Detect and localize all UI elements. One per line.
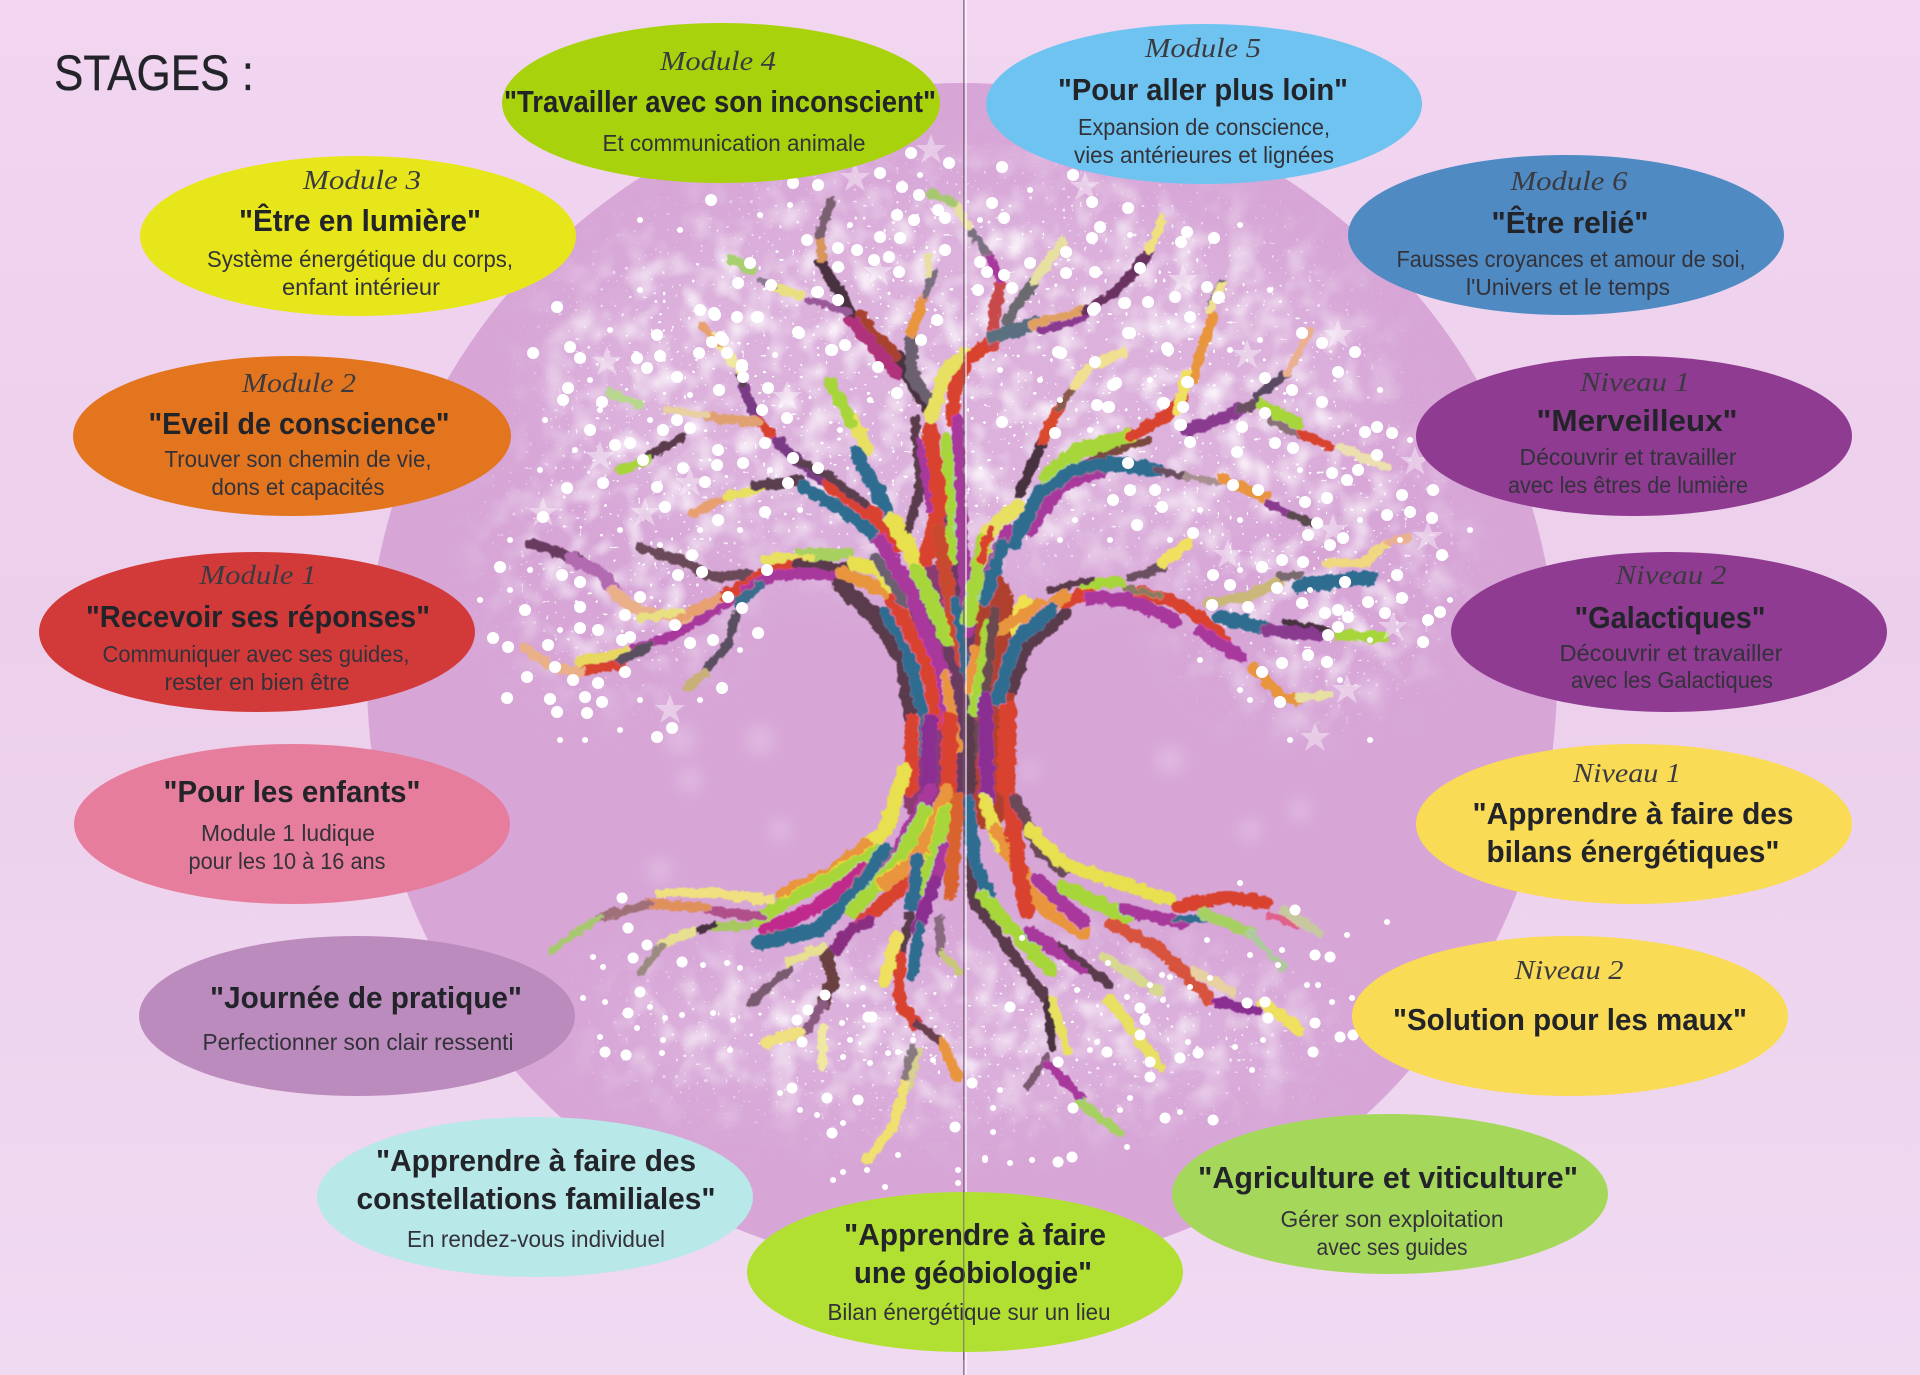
description: Communiquer avec ses guides, xyxy=(102,641,410,667)
description: Et communication animale xyxy=(602,130,866,156)
faint glow spots xyxy=(648,676,1384,882)
description xyxy=(1560,640,1783,693)
description: Trouver son chemin de vie, xyxy=(164,446,432,472)
heading: "Travailler avec son inconscient" xyxy=(504,84,936,119)
description xyxy=(1508,444,1748,498)
fold line over the lower panel xyxy=(963,1190,964,1360)
label: Module 1 xyxy=(198,560,316,590)
panel: Niveau 2 solution xyxy=(1352,936,1788,1096)
white dots xyxy=(480,153,1470,1187)
label: Niveau 1 xyxy=(1572,758,1681,788)
heading xyxy=(356,1143,716,1216)
panel: Niveau 1 bilans xyxy=(1416,744,1852,904)
description: enfant intérieur xyxy=(282,274,440,300)
panel: Module 1 xyxy=(39,552,475,712)
description xyxy=(1280,1206,1504,1260)
description: l'Univers et le temps xyxy=(1466,274,1670,300)
label: Niveau 1 xyxy=(1579,367,1690,397)
description xyxy=(188,820,386,874)
description: avec les êtres de lumière xyxy=(1508,472,1748,498)
heading: "Galactiques" xyxy=(1574,600,1766,635)
label: Niveau 2 xyxy=(1513,955,1624,985)
heading: "Apprendre à faire des xyxy=(376,1143,696,1178)
background circle xyxy=(367,83,1557,1273)
heading: "Être relié" xyxy=(1492,204,1648,240)
heading: constellations familiales" xyxy=(356,1181,716,1216)
panel: Module 6 xyxy=(1348,155,1784,315)
panel: Constellations familiales xyxy=(317,1117,753,1277)
description: Système énergétique du corps, xyxy=(207,246,513,272)
description: En rendez-vous individuel xyxy=(407,1226,665,1252)
label: Module 5 xyxy=(1144,33,1261,63)
heading xyxy=(1472,796,1794,869)
description: Module 1 ludique xyxy=(201,820,375,846)
label: Module 6 xyxy=(1509,166,1628,196)
panel: Module 4 xyxy=(502,23,940,183)
description: Perfectionner son clair ressenti xyxy=(202,1029,514,1055)
label: Module 2 xyxy=(241,368,356,398)
panel: Niveau 1 Merveilleux xyxy=(1416,356,1852,516)
description: pour les 10 à 16 ans xyxy=(188,848,386,874)
heading: "Pour aller plus loin" xyxy=(1058,72,1348,107)
heading: "Solution pour les maux" xyxy=(1393,1002,1747,1037)
label: Niveau 2 xyxy=(1614,560,1726,590)
panel: Niveau 2 Galactiques xyxy=(1451,552,1887,712)
tree: trunk xyxy=(800,420,1067,810)
panel: Module 3 xyxy=(140,156,576,316)
heading: "Journée de pratique" xyxy=(210,980,522,1015)
description: Découvrir et travailler xyxy=(1560,640,1783,666)
title: STAGES : xyxy=(54,45,254,101)
cloud and tiny speckle texture xyxy=(472,138,1478,1152)
tree xyxy=(523,193,1407,1160)
panel: Module 2 xyxy=(73,356,511,516)
heading: "Apprendre à faire xyxy=(844,1217,1106,1252)
description: Découvrir et travailler xyxy=(1520,444,1737,470)
heading: "Agriculture et viticulture" xyxy=(1198,1160,1578,1195)
heading: "Merveilleux" xyxy=(1536,403,1738,438)
white haze behind the tree xyxy=(560,200,1360,1100)
heading: "Pour les enfants" xyxy=(164,774,420,809)
description: vies antérieures et lignées xyxy=(1074,142,1334,168)
description: Fausses croyances et amour de soi, xyxy=(1396,246,1746,272)
panel: Journée de pratique xyxy=(139,936,575,1096)
description: rester en bien être xyxy=(164,669,350,695)
heading: "Être en lumière" xyxy=(239,202,481,238)
description xyxy=(207,246,513,300)
heading: une géobiologie" xyxy=(854,1255,1092,1290)
tree: right canopy branches xyxy=(931,193,1407,700)
description xyxy=(1396,246,1746,300)
heading: "Recevoir ses réponses" xyxy=(86,599,430,634)
faint stars xyxy=(528,134,1443,751)
heading: bilans énergétiques" xyxy=(1486,834,1780,869)
description: dons et capacités xyxy=(212,474,384,500)
panel: Agriculture et viticulture xyxy=(1172,1114,1608,1274)
description: avec les Galactiques xyxy=(1571,667,1773,693)
description: Bilan énergétique sur un lieu xyxy=(828,1299,1110,1325)
tree: left canopy branches xyxy=(523,203,935,688)
heading: "Eveil de conscience" xyxy=(148,406,450,441)
description xyxy=(102,641,410,695)
tree: roots xyxy=(550,770,1320,1160)
description xyxy=(164,446,432,500)
panel: Module 5 xyxy=(986,24,1422,184)
description: avec ses guides xyxy=(1316,1234,1468,1260)
description: Gérer son exploitation xyxy=(1280,1206,1504,1232)
description xyxy=(1074,114,1334,168)
heading: "Apprendre à faire des xyxy=(1472,796,1794,831)
heading xyxy=(844,1217,1106,1290)
fold line xyxy=(963,0,967,1375)
panel: Pour les enfants xyxy=(74,744,510,904)
panel: Géobiologie xyxy=(747,1192,1183,1352)
description: Expansion de conscience, xyxy=(1078,114,1330,140)
label: Module 4 xyxy=(659,46,776,76)
label: Module 3 xyxy=(302,165,421,195)
